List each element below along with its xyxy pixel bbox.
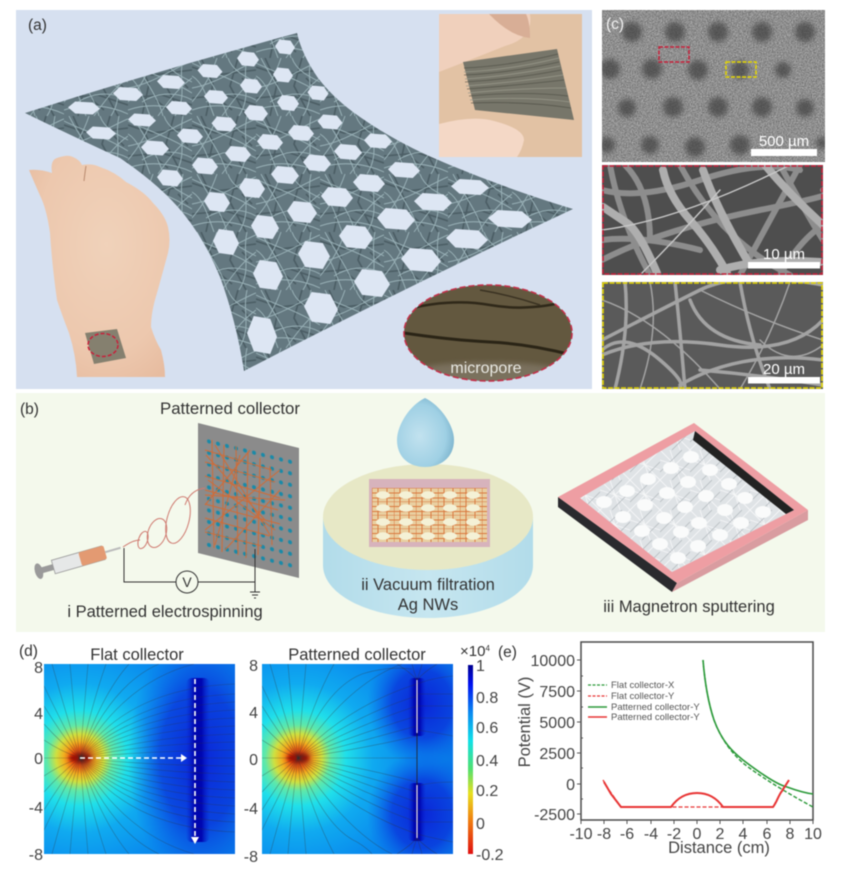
x axis title: Distance (cm) [668, 839, 770, 857]
yellow selection box [726, 62, 756, 77]
label: ii vacuum filtration: ii Vacuum filtration [361, 576, 495, 594]
y axis tick labels: 2500 [539, 746, 575, 763]
legend [588, 680, 700, 723]
SEM: red close-up [602, 165, 833, 275]
red dashed marker [88, 334, 118, 356]
membrane holes [596, 451, 771, 564]
arrow: x scan line [80, 757, 184, 759]
y axis tick labels: 7500 [539, 684, 575, 701]
colorbar [460, 643, 504, 864]
arrow: y scan line [194, 679, 196, 839]
x axis tick labels: 8 [786, 826, 795, 843]
colorbar: 0 [476, 816, 485, 833]
unit label: ×10 [460, 643, 485, 660]
collector strips [416, 680, 418, 838]
y axis labels: 8 [249, 658, 258, 675]
y axis tick labels: 5000 [539, 715, 575, 732]
polymer jet spiral [123, 488, 205, 550]
colorbar: 0.4 [476, 753, 498, 770]
series: patterned collector green [703, 660, 813, 794]
series: flat collector-X [703, 660, 813, 807]
y axis labels: 4 [249, 705, 258, 722]
scale bar: 10 µm [748, 246, 820, 268]
panel: d, electric field simulation [19, 633, 504, 883]
legend: Flat collector-Y [611, 691, 675, 702]
SEM: low magnification [599, 10, 828, 162]
scale bar: 500 µm [751, 133, 817, 156]
y axis tick labels [530, 653, 575, 824]
scale bar: 10 µm: 10 µm [763, 246, 805, 263]
x axis tick labels: 10 [804, 826, 822, 843]
y axis labels: 0 [34, 751, 43, 768]
perforated nanofiber sheet [25, 33, 573, 371]
frame sides [558, 497, 677, 592]
step ii: vacuum filtration [323, 398, 533, 618]
y axis labels: 4 [34, 706, 43, 723]
filter membrane [369, 479, 490, 547]
panel: a, wearable membrane [16, 10, 592, 389]
x axis tick labels: 2 [716, 826, 725, 843]
cylinder body [323, 517, 533, 618]
patch on wrist [85, 329, 126, 364]
label: d: (d) [19, 643, 38, 660]
label: micropore: micropore [450, 360, 522, 377]
axis ticks [577, 660, 813, 824]
series: flat collector-Y [603, 780, 789, 807]
colorbar: 1 [476, 658, 485, 675]
voltmeter: V [182, 574, 192, 590]
y axis tick labels: -2500 [534, 807, 575, 824]
step i: patterned electrospinning [33, 423, 299, 621]
label: patterned collector: Patterned collector [160, 399, 300, 418]
y axis labels: 8 [34, 660, 43, 677]
x axis tick labels: 6 [763, 826, 772, 843]
colorbar: -0.2 [476, 847, 504, 864]
legend: Patterned collector-Y [611, 712, 700, 723]
colorbar: 0.6 [476, 720, 498, 737]
syringe [33, 540, 123, 580]
y axis title: Potential (V) [516, 677, 534, 767]
y axis tick labels: 0 [566, 777, 575, 794]
label: b: (b) [20, 401, 39, 418]
water drop [397, 398, 454, 467]
title: patterned collector: Patterned collector [288, 646, 426, 664]
y axis labels: 0 [249, 752, 258, 769]
colorbar: 0.8 [476, 690, 498, 707]
x axis tick labels: 4 [739, 826, 748, 843]
ground symbol [250, 592, 260, 598]
y axis labels: -8 [29, 847, 43, 864]
label: a: (a) [28, 17, 47, 34]
x axis tick labels: 0 [693, 826, 702, 843]
label: Ag NWs: Ag NWs [398, 596, 458, 614]
panel: e, potential line chart [498, 642, 822, 857]
y axis labels [29, 660, 43, 864]
inner dark wall [693, 431, 794, 514]
photo: membrane held between fingers [439, 14, 582, 157]
x axis tick labels: -6 [620, 826, 634, 843]
collector plate [198, 423, 299, 578]
y axis labels: -4 [29, 800, 43, 817]
legend: Flat collector-X [611, 680, 675, 691]
scale bar: 20 µm [748, 361, 820, 384]
plot frame [581, 642, 813, 820]
y axis tick labels: 10000 [530, 653, 575, 670]
y axis labels: -8 [244, 849, 258, 866]
label: c: (c) [606, 16, 624, 33]
label: e: (e) [498, 644, 517, 661]
x axis tick labels: -2 [667, 826, 681, 843]
heatmap: patterned collector [244, 642, 477, 876]
callout: micropore close-up [404, 285, 572, 386]
photo: hand with patch on wrist [29, 156, 170, 377]
heatmap: flat collector [29, 633, 272, 883]
title: flat collector: Flat collector [90, 646, 184, 664]
scale bar: 20 µm: 20 µm [763, 361, 805, 378]
legend: Patterned collector-Y [611, 702, 700, 713]
circuit wire [124, 548, 255, 592]
x axis tick labels: -4 [644, 826, 658, 843]
x axis tick labels: -8 [597, 826, 611, 843]
x axis tick labels: -10 [569, 826, 593, 843]
red selection box [659, 47, 689, 62]
x axis tick labels [569, 826, 822, 843]
scale bar: 500 µm: 500 µm [759, 133, 809, 150]
label: iii magnetron sputtering: iii Magnetron sputtering [603, 598, 775, 616]
SEM: yellow close-up [602, 279, 823, 389]
panel: b, fabrication process [16, 393, 825, 632]
y axis labels [244, 658, 258, 866]
pink frame [558, 423, 808, 583]
series: patterned collector red [604, 780, 789, 807]
label: i patterned electrospinning: i Patterned electrospinning [67, 603, 263, 621]
voltmeter [176, 571, 198, 593]
cylinder top [323, 464, 533, 570]
unit label: 4 [485, 644, 490, 653]
step iii: magnetron sputtering [558, 423, 808, 616]
y axis labels: -4 [244, 801, 258, 818]
colorbar: 0.2 [476, 783, 498, 800]
fibre membrane [580, 431, 794, 572]
panel: c, SEM images [599, 10, 833, 389]
